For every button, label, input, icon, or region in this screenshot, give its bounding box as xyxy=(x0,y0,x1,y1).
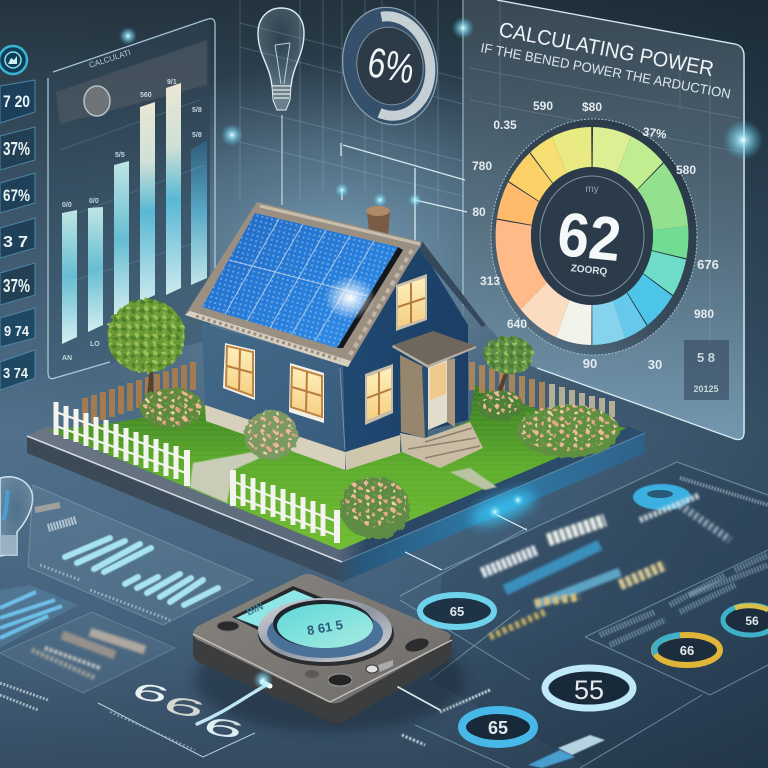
card 2: 37% xyxy=(3,139,30,159)
sixes readout panel: 6 xyxy=(197,712,249,744)
streak panel xyxy=(28,485,253,625)
small legend chips xyxy=(402,690,605,768)
panel: floor dashboard right xyxy=(400,462,768,768)
panel: bar chart xyxy=(47,19,215,379)
bar value labels: 9/1 xyxy=(167,79,177,86)
bush: right xyxy=(516,405,620,457)
tree: left xyxy=(107,299,185,397)
window: left wall two xyxy=(289,363,324,423)
porch and door xyxy=(392,331,476,440)
icon: hanging light bulb xyxy=(258,8,304,205)
chart: streak rows xyxy=(482,495,730,637)
solar panel array xyxy=(202,213,403,348)
bar value labels: 5/8 xyxy=(192,107,202,114)
card 5: 37% xyxy=(3,276,30,296)
wall: gable side xyxy=(343,247,468,452)
chart header strip xyxy=(56,40,207,124)
chart: text grid xyxy=(600,478,768,645)
subtitle: IF THE BENED POWER THE ARDUCTION xyxy=(479,40,732,102)
porch steps xyxy=(400,422,483,468)
sixes readout panel xyxy=(98,678,255,757)
window: upper gable xyxy=(396,274,427,331)
bar value labels: AN xyxy=(62,355,72,362)
card 6 xyxy=(0,308,35,347)
gauge dial: ZOORQ xyxy=(570,263,608,278)
bar value labels: 0/0 xyxy=(62,202,72,209)
roof xyxy=(185,202,486,367)
holographic wall grid xyxy=(240,0,463,330)
card 7: 3 74 xyxy=(3,365,29,382)
wooden back fences xyxy=(85,362,612,426)
card 4: 3 7 xyxy=(3,234,28,251)
ring: right edge: 56 xyxy=(745,614,759,628)
icon: floor light bulb xyxy=(0,477,33,556)
window: lower gable xyxy=(365,364,393,425)
chart: top blue dial xyxy=(633,484,691,510)
floating platform xyxy=(27,385,645,582)
garden path xyxy=(190,452,260,503)
gauge dial: my xyxy=(585,184,599,195)
bar value labels: 560 xyxy=(140,92,152,99)
text chip panel xyxy=(0,612,175,693)
gauge scale labels: 676 xyxy=(697,257,719,272)
card 1 xyxy=(0,80,35,123)
house xyxy=(185,202,486,470)
gauge scale labels: 980 xyxy=(694,307,714,321)
ring: yellow gauge xyxy=(654,635,720,665)
ring: left: 65 xyxy=(450,604,464,619)
bar value labels: 5/5 xyxy=(115,152,125,159)
blue glow on platform edge xyxy=(467,484,539,532)
tree: right xyxy=(484,336,534,397)
gauge scale labels: 0.35 xyxy=(493,118,517,132)
gauge coloured arcs xyxy=(513,147,671,325)
card 1: 7 20 xyxy=(3,92,30,111)
gauge scale labels: 580 xyxy=(676,163,696,177)
holographic connector lines xyxy=(341,143,467,245)
ring: lower: 65 xyxy=(488,718,508,738)
gauge scale labels: 80 xyxy=(472,205,486,219)
device buttons xyxy=(217,621,430,686)
gauge scale labels: $80 xyxy=(582,100,602,114)
gauge scale labels: 640 xyxy=(507,317,527,331)
card 3 xyxy=(0,173,35,213)
gauge scale labels: 313 xyxy=(480,274,500,288)
bush: by wall xyxy=(244,410,298,460)
sixes readout panel: 6 xyxy=(126,678,174,709)
chimney xyxy=(366,206,390,236)
rear rectangular screen xyxy=(232,586,328,632)
card 4 xyxy=(0,218,35,258)
gauge scale labels: 590 xyxy=(533,99,553,113)
bush: behind porch xyxy=(477,390,523,420)
gauge scale labels: 30 xyxy=(648,357,662,372)
smart meter device xyxy=(193,574,465,732)
panel: floor dashboard left xyxy=(0,477,255,757)
gauge scale labels: 37% xyxy=(642,124,668,142)
chart header strip: CALCULATI xyxy=(88,48,132,70)
bar value labels: LO xyxy=(90,341,100,348)
blue wave panel xyxy=(0,585,78,648)
flowering bushes xyxy=(140,388,620,539)
device body xyxy=(193,636,452,723)
bar value labels xyxy=(62,79,202,362)
gauge scale labels: 90 xyxy=(583,356,597,371)
left data card column xyxy=(0,46,35,390)
title: CALCULATING POWER xyxy=(497,18,716,81)
panel: calculating power gauge xyxy=(463,0,745,440)
bar value labels: 0/0 xyxy=(89,198,99,205)
gauge scale labels xyxy=(472,99,719,372)
bar value labels: 5/8 xyxy=(192,132,202,139)
ring: centre xyxy=(545,668,633,708)
ring: left xyxy=(420,595,494,627)
rear rectangular screen: BIN xyxy=(245,601,265,618)
card 2 xyxy=(0,127,35,170)
foundation xyxy=(205,405,400,470)
card 7 xyxy=(0,350,35,390)
ring: lower xyxy=(462,710,534,744)
gauge outer ring xyxy=(491,119,697,355)
device shadow xyxy=(195,628,465,732)
gauge centre xyxy=(531,167,653,305)
bush: front xyxy=(340,477,410,539)
bars xyxy=(62,83,207,344)
card 6: 9 74 xyxy=(4,323,30,340)
icon: round badge xyxy=(0,46,27,74)
ring: yellow gauge: 66 xyxy=(680,643,694,658)
white picket fences xyxy=(56,402,338,543)
wall: left side xyxy=(202,323,345,452)
lawn xyxy=(48,385,627,550)
gauge dial xyxy=(491,119,697,355)
gauge scale labels: 780 xyxy=(472,159,492,173)
window: left wall one xyxy=(223,343,255,400)
ring: centre: 55 xyxy=(574,675,604,705)
card 3: 67% xyxy=(3,186,30,205)
gauge value: 62 xyxy=(554,200,624,275)
card 5 xyxy=(0,263,35,305)
small data block: 20125 xyxy=(693,384,719,394)
bush: back left xyxy=(140,388,204,428)
percentage ring dial xyxy=(333,0,447,132)
dial reading: 8 61 5 xyxy=(306,617,344,638)
tiny note xyxy=(0,683,48,710)
ring: right edge xyxy=(723,605,768,635)
percentage ring dial: 6% xyxy=(364,38,418,92)
sixes readout panel: 6 xyxy=(157,690,211,723)
small data block xyxy=(684,340,729,400)
dial bezel xyxy=(258,598,394,666)
light flares xyxy=(119,17,763,690)
small data block: 5 8 xyxy=(697,350,715,365)
connector cables xyxy=(197,682,440,724)
